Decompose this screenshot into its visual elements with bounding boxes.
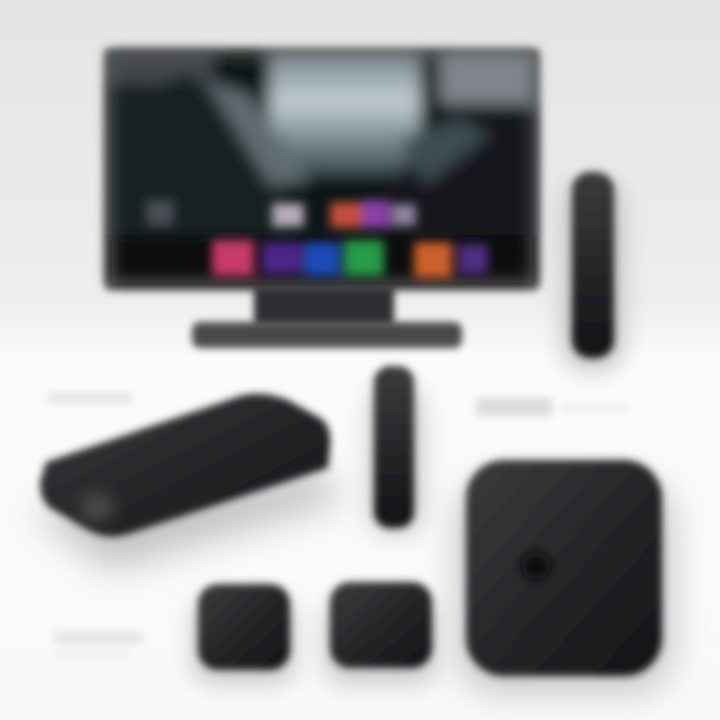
- remote control, right of tv: [562, 172, 624, 370]
- small media box, right: [324, 582, 438, 684]
- box body: [466, 460, 662, 676]
- tv stand neck: [254, 286, 394, 326]
- label placeholder: top left of box: [48, 392, 132, 404]
- box port detail: [82, 494, 112, 520]
- box body: [330, 582, 432, 668]
- remote shadow: [562, 180, 624, 370]
- box body: [40, 394, 330, 537]
- box body: [198, 584, 290, 670]
- tv app tiles: [146, 200, 488, 278]
- tv stand base: [192, 322, 462, 348]
- box shadow: [192, 600, 296, 684]
- box shadow: [30, 470, 345, 570]
- large square media box: [458, 460, 672, 692]
- box logo: [522, 552, 550, 580]
- remote body: [374, 366, 414, 528]
- label placeholder: bottom left: [54, 632, 144, 658]
- remote body: [572, 172, 614, 358]
- tv screen bezel: [104, 48, 540, 290]
- streaming box, large wedge: [30, 394, 345, 570]
- small media box, left: [192, 584, 296, 684]
- box shadow: [324, 600, 438, 684]
- remote shadow: [368, 385, 424, 535]
- label placeholder: top right: [476, 398, 630, 416]
- tv screen picture: [112, 54, 532, 282]
- box shadow: [458, 480, 672, 692]
- remote control, center: [368, 366, 424, 535]
- television: [104, 48, 540, 348]
